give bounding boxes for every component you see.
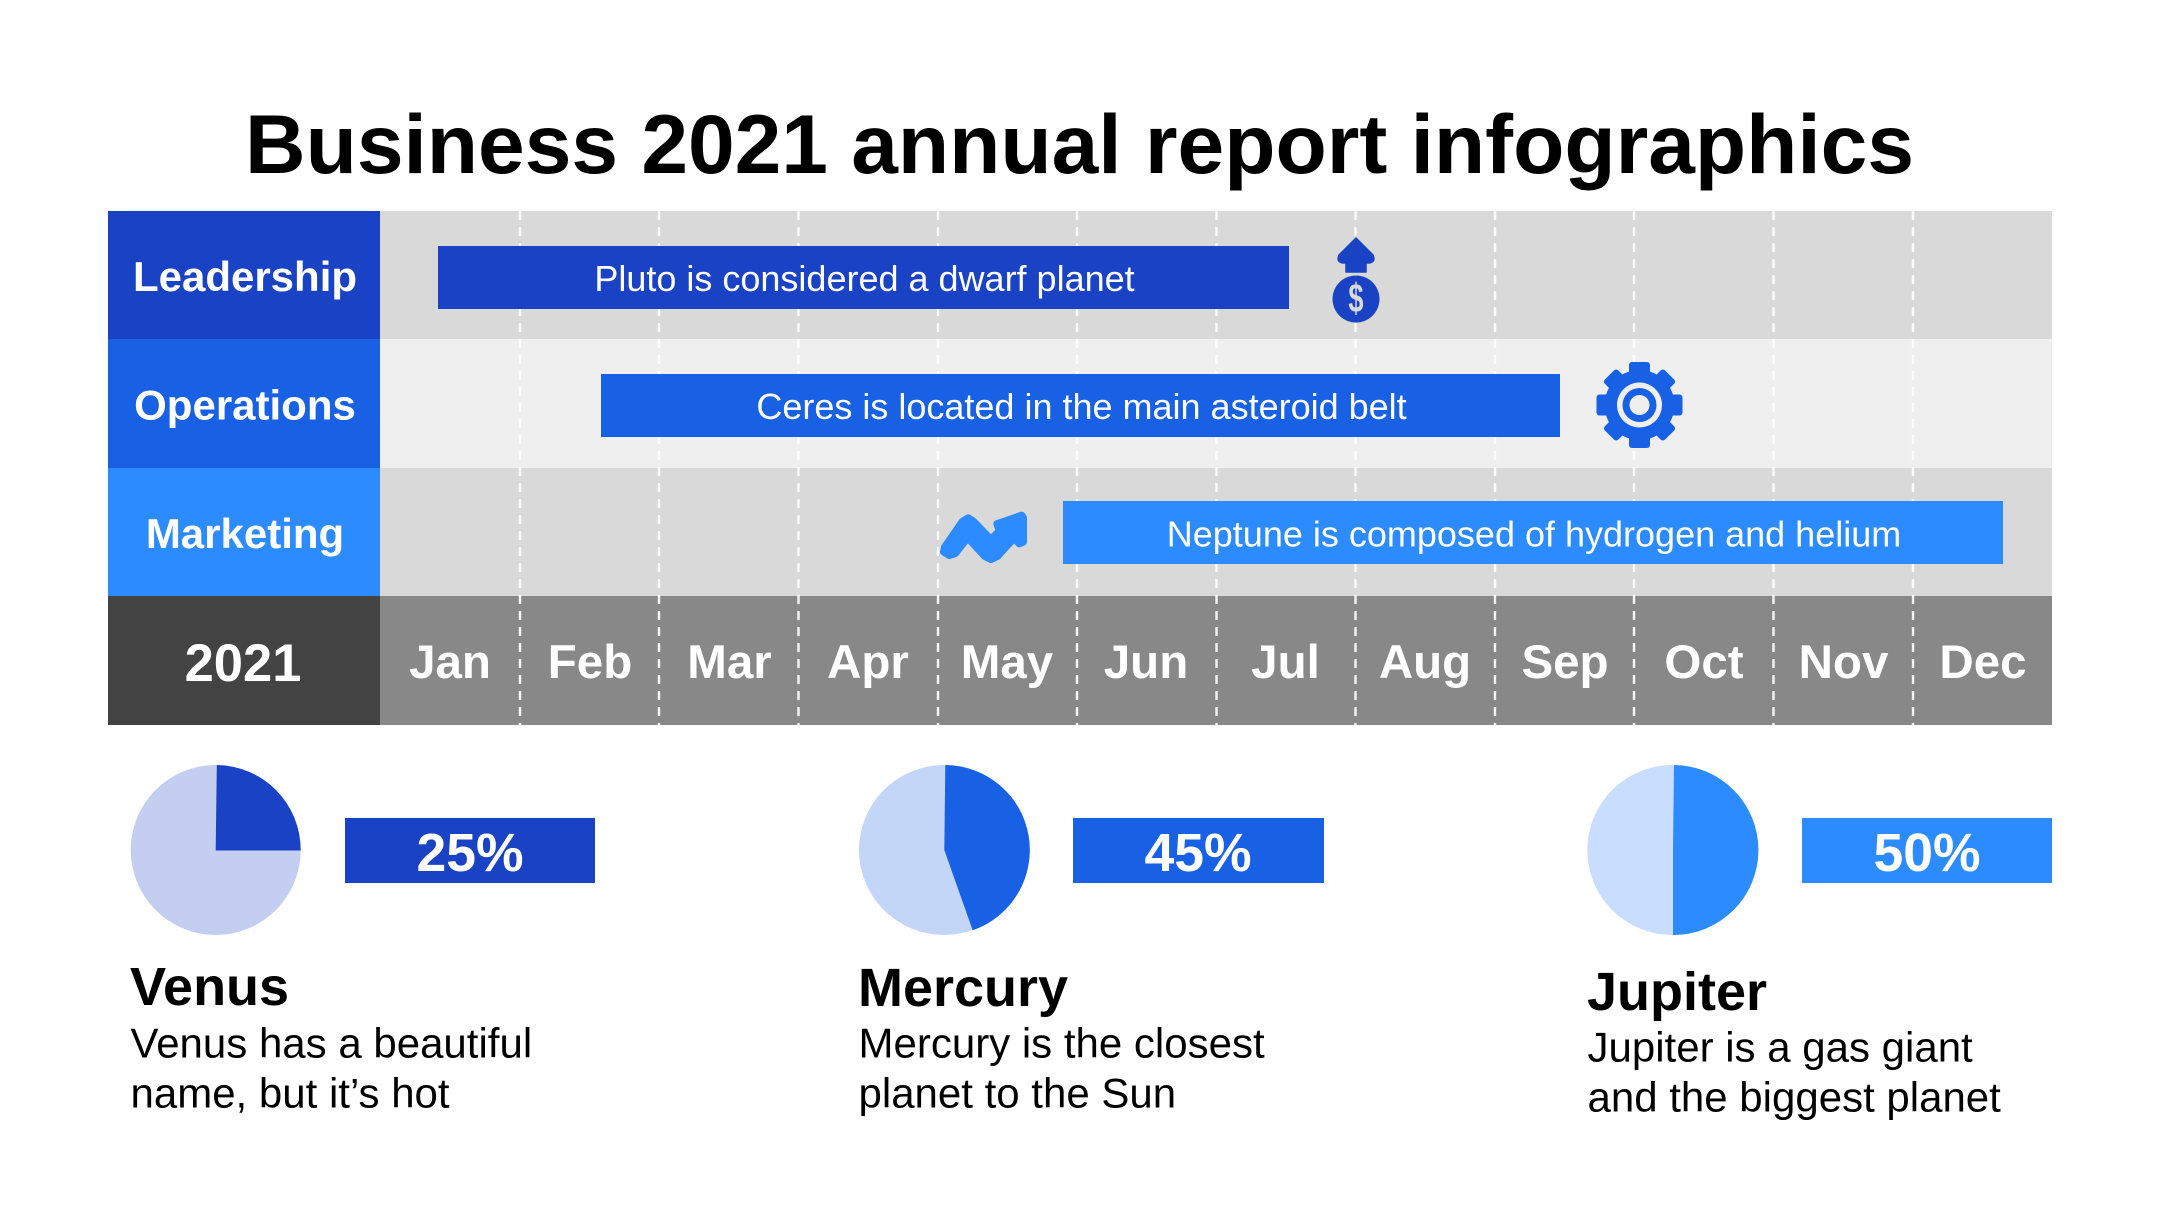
month labels: Jan: [409, 636, 491, 689]
pie chart: 50%: [1587, 765, 1758, 935]
heading: Jupiter: Jupiter: [1587, 962, 1767, 1022]
panel: gantt timeline: [108, 211, 2052, 725]
row background: leadership: [380, 211, 2052, 339]
label: 2021: 2021: [185, 634, 301, 693]
text: Mercury description: [858, 1020, 1265, 1116]
panel: Venus: [130, 765, 595, 1116]
icon: money up arrow: $: [1348, 277, 1364, 321]
month labels: Feb: [548, 636, 632, 689]
month labels: Aug: [1379, 636, 1471, 689]
text: Venus description: Venus has a beautiful: [130, 1020, 532, 1066]
bar: Neptune: [1063, 501, 2003, 564]
icon: gear: [1596, 362, 1682, 448]
month labels: May: [961, 636, 1054, 689]
bar: Pluto: Pluto is considered a dwarf planet: [594, 258, 1135, 299]
label: Marketing: Marketing: [146, 510, 344, 557]
value: 50%: [1802, 818, 2052, 883]
month labels: Dec: [1939, 636, 2027, 689]
value: 50%: 50%: [1873, 824, 1981, 883]
panel: Jupiter: [1587, 765, 2052, 1120]
panel: Mercury: [858, 765, 1324, 1116]
value: 25%: [345, 818, 595, 883]
text: Venus description: name, but it’s hot: [130, 1070, 450, 1116]
heading: Mercury: Mercury: [858, 958, 1068, 1018]
text: Jupiter description: Jupiter is a gas giant: [1588, 1024, 1973, 1070]
icon: growth arrow: [944, 516, 1023, 559]
pie chart: 25%: [131, 765, 301, 935]
bar: Ceres: [601, 374, 1560, 437]
text: Venus description: [130, 1020, 532, 1116]
bar: Pluto: [438, 246, 1289, 309]
value: 25%: 25%: [416, 824, 524, 883]
label: Leadership: Leadership: [133, 253, 357, 300]
value: 45%: [1073, 818, 1324, 883]
month labels: Sep: [1521, 636, 1609, 689]
label: 2021: [108, 596, 380, 725]
text: Jupiter description: and the biggest planet: [1588, 1074, 2001, 1120]
month labels: Nov: [1799, 636, 1889, 689]
text: Mercury description: Mercury is the closest: [858, 1020, 1265, 1066]
month labels: Mar: [687, 636, 772, 689]
month labels: Oct: [1664, 636, 1744, 689]
label: Operations: Operations: [134, 382, 356, 428]
icon: money up arrow: [1332, 238, 1380, 322]
row background: marketing: [380, 468, 2052, 596]
label: Leadership: [108, 211, 380, 339]
text: Mercury description: planet to the Sun: [858, 1070, 1176, 1116]
month labels: Jul: [1251, 636, 1320, 689]
bar: Ceres: Ceres is located in the main asteroid belt: [756, 386, 1407, 427]
pie chart: 45%: [859, 765, 1030, 935]
bar: Neptune: Neptune is composed of hydrogen and helium: [1167, 514, 1901, 554]
text: Jupiter description: [1588, 1024, 2001, 1120]
title: Business 2021 annual report infographics: [245, 97, 1914, 191]
row background: months: [380, 596, 2052, 725]
heading: Venus: Venus: [130, 957, 289, 1017]
label: Operations: [108, 339, 380, 468]
month labels: Jun: [1104, 636, 1188, 689]
month labels: Apr: [827, 636, 909, 689]
label: Marketing: [108, 468, 380, 596]
month labels: [409, 636, 2027, 689]
value: 45%: 45%: [1144, 824, 1252, 883]
row background: operations: [380, 339, 2052, 468]
